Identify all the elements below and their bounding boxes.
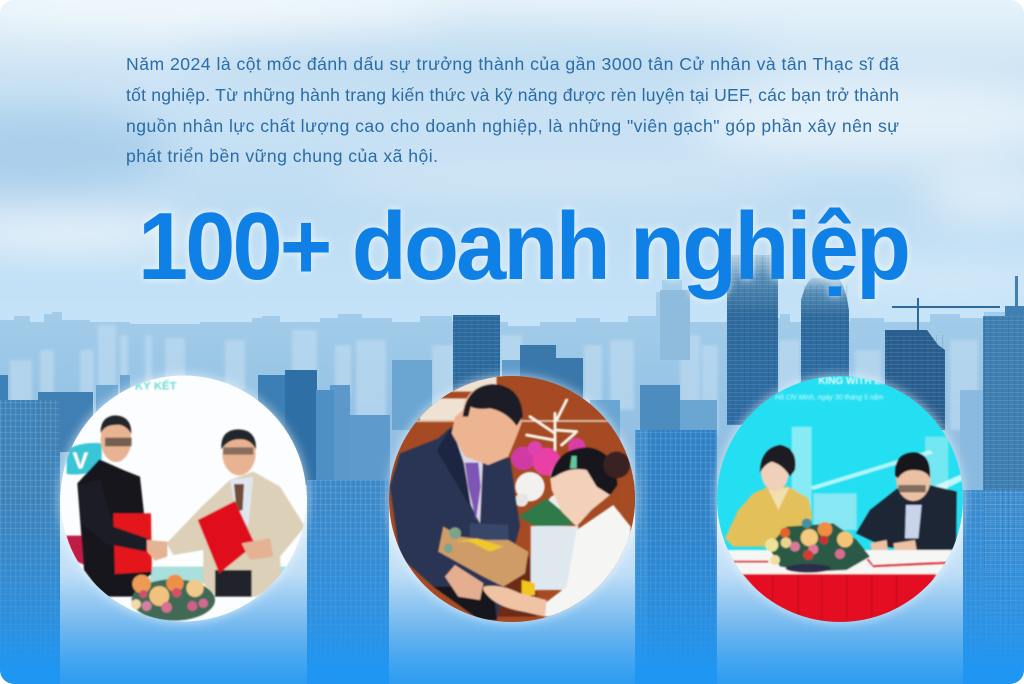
bottom blue fade [0, 528, 1024, 684]
man in beige suit [147, 429, 305, 597]
wrapped bouquet and trophy [438, 523, 535, 597]
clouds [0, 0, 1024, 300]
intro paragraph: nguồn nhân lực chất lượng cao cho doanh nghiệp, là những "viên gạch" góp phần xây nên sự [126, 116, 899, 136]
pink and white flowers [511, 438, 585, 530]
photo glow rings [60, 374, 964, 623]
mid-distance pale towers [10, 325, 978, 445]
man in black suit [77, 415, 152, 597]
photo: contract signing: Hồ Chí Minh, ngày 30 tháng 5 năm [775, 392, 883, 401]
distant skyline [0, 280, 1005, 495]
foreground towers [0, 255, 1024, 684]
photo: signing handshake: KÝ KẾT [135, 379, 177, 392]
photo: signing handshake [60, 375, 308, 623]
intro paragraph: tốt nghiệp. Từ những hành trang kiến thức và kỹ năng được rèn luyện tại UEF, các bạn trở thành [126, 85, 899, 105]
woman in yellow jacket [725, 445, 813, 547]
light columns under photos [60, 495, 963, 684]
woman in white blouse [483, 447, 632, 617]
photo: signing handshake: V [73, 447, 89, 473]
photo: flower presentation [380, 370, 637, 623]
headline glow: 100+ doanh nghiệp [138, 193, 911, 300]
intro paragraph: Năm 2024 là cột mốc đánh dấu sự trưởng thành của gần 3000 tân Cử nhân và tân Thạc sĩ đã [126, 54, 899, 74]
headline: 100+ doanh nghiệp [138, 193, 911, 300]
photo: contract signing: KING WITH ENV [818, 376, 895, 387]
white vase [531, 526, 578, 590]
intro paragraph [126, 54, 899, 166]
white coral decoration [527, 400, 577, 450]
signing table [717, 550, 967, 623]
man in navy suit [390, 384, 523, 620]
intro paragraph: phát triển bền vững chung của xã hội. [126, 146, 438, 166]
man in dark suit signing [856, 452, 957, 555]
flower bouquet [131, 575, 215, 621]
photo: contract signing [717, 375, 967, 623]
mid-distance blue towers [96, 290, 984, 505]
flower centerpiece [765, 518, 870, 573]
